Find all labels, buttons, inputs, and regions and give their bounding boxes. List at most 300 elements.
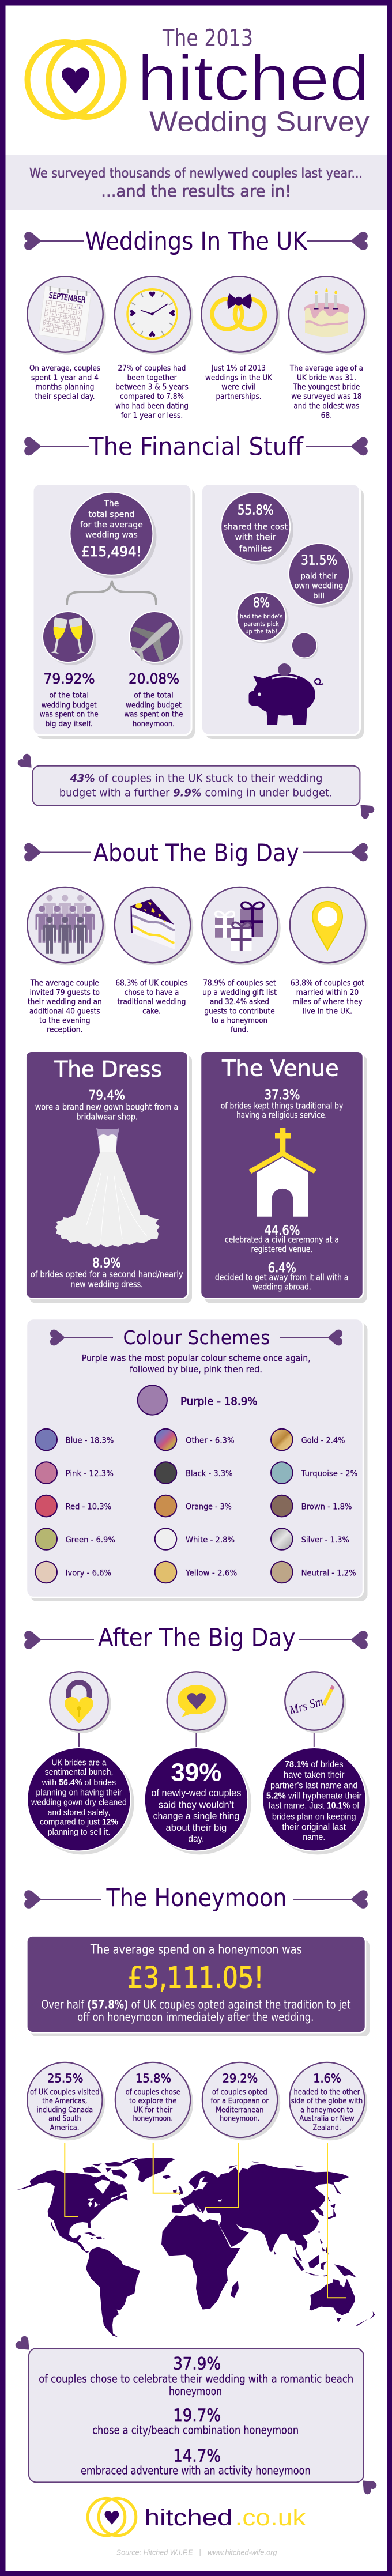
text: wedding facts: between 3 & 5 years [115,383,189,392]
text: wedding facts: we surveyed was 18 [291,392,361,401]
colour swatch labels: Red - 10.3% [66,1502,111,1511]
icon: calendar: 10 [55,314,60,318]
callout: honeymoon types [14,2334,378,2496]
column: no regrets [145,1672,251,1854]
bubble: 39%: 39% [171,1758,221,1786]
colour swatch labels: Turquoise - 2% [301,1469,357,1479]
text: big day facts: and 32.4% asked [210,997,269,1006]
connector lines: bubbles to map [65,2143,346,2298]
stat: big day share: wedding budget [42,700,97,710]
icon: calendar: 25 [59,325,64,329]
text: colour intro [82,1352,311,1375]
text: big day facts: up a wedding gift list [202,988,277,997]
title: The 2013 hitched Wedding Survey: Wedding Survey [149,107,370,138]
bubble: UK: to explore the [129,2096,176,2106]
text: big day facts: cake. [142,1006,161,1016]
bubble: Australia and NZ [289,2062,367,2140]
icon: church [249,1128,316,1217]
map: British Isles [173,2186,183,2195]
stat: big day share: was spent on the [40,710,99,719]
bubble: paid their own [289,544,353,608]
panel: honeymoon spend: Over half (57.8%) of UK couples opted against the tradition to jet [42,1998,351,2012]
panel: calendar circle [27,276,106,355]
bubble: gown text: with 56.4% of brides [42,1778,116,1787]
colour swatch labels: Neutral - 1.2% [301,1569,356,1578]
text: wedding facts: The youngest bride [293,383,360,392]
panel: The Venue: having a religious service. [236,1110,327,1121]
panel: The Dress: wore a brand new gown bought from a [35,1102,178,1112]
bubble: shared the cost: with their [235,533,276,542]
bubble: Australia and NZ: headed to the other [294,2087,360,2096]
map: Eurasia [172,2164,350,2252]
colour swatch grid [35,1429,293,1583]
icon: heart padlock [50,1672,111,1733]
icon: rings and bow tie [212,293,265,329]
heading: Colour Schemes [50,1326,342,1349]
brace [67,581,156,605]
colour swatch labels: Silver - 1.3% [301,1536,349,1545]
bubble: 39% [145,1748,251,1854]
heart: top left [14,2334,35,2355]
colour swatch labels: Brown - 1.8% [301,1502,352,1511]
bubble: 39%: day. [188,1833,204,1845]
map: New Zealand [356,2311,375,2326]
heading: About The Big Day [24,839,368,867]
bubble: 39%: of newly-wed couples [151,1787,241,1798]
stat: honeymoon share: of the total [134,691,174,700]
icon: calendar: 19 [65,320,70,325]
callout: honeymoon types: 14.7% [173,2446,221,2466]
map: Australia [310,2279,355,2322]
icon: calendar: 3 [57,308,60,312]
heart: top left [16,752,37,773]
chart: world map [17,2158,375,2337]
icon: calendar: S [78,307,81,310]
icon: guests [36,895,95,954]
source line [116,2548,277,2557]
icon: calendar: 20 [70,321,75,325]
panel: The Venue: 6.4% [268,1261,296,1276]
icon: calendar: 31 [53,329,58,333]
text: wedding facts: were civil [221,383,256,392]
icon: champagne glasses [43,612,96,665]
map: South America [86,2247,140,2337]
callout: honeymoon types: honeymoon [169,2385,222,2398]
icon: calendar: 7 [78,311,80,315]
heading: The Honeymoon [24,1884,368,1913]
text: colour intro: followed by blue, pink then red. [130,1364,262,1375]
colour swatch labels [66,1436,357,1578]
bubble: Americas: America. [50,2123,79,2132]
panel: The Venue [201,1051,367,1303]
icon: calendar: 4 [62,310,65,313]
callout: honeymoon types: 37.9% [173,2354,221,2374]
text: wedding facts: spent 1 year and 4 [31,373,99,382]
bubble: Americas: the Americas, [42,2096,87,2106]
icon: calendar: T [52,303,55,307]
panel: honeymoon spend: £3,111.05! [127,1961,264,1996]
stat: big day share: 79.92% [44,670,95,687]
heading: The Financial Stuff: The Financial Stuff [89,433,304,462]
bubble: paid their own: bill [313,591,325,601]
bubble: 39%: said they wouldn’t [159,1799,234,1810]
text: big day facts: their wedding and an [28,997,102,1006]
bubble: UK: 15.8% [135,2071,171,2085]
panel: honeymoon spend [27,1936,370,2036]
bubble: bride's parents: parents pick [244,620,279,628]
heart: bottom right [355,799,376,820]
icon: cake slice [130,899,175,949]
icon: speech bubble heart [167,1672,228,1733]
panel: The Dress: 79.4% [89,1088,125,1103]
colour swatch labels: Yellow - 2.6% [185,1569,237,1578]
text: wedding facts: 68. [321,411,332,420]
bubble: last names text: have taken their [284,1770,344,1780]
bubble: 39%: about their big [166,1822,227,1833]
text: big day facts: miles of where they [292,997,363,1006]
map: Africa [161,2214,240,2310]
colour swatch labels: Ivory - 6.6% [66,1569,111,1578]
bubble: gown text: and stored safely, [48,1808,110,1817]
bubble: Americas: and South [48,2114,81,2124]
panel: birthday cake circle [289,276,367,355]
bubble: Europe: of couples opted [212,2087,267,2096]
bubble: paid their own: own wedding [295,582,343,591]
bubble: last names text: 5.2% will hyphenate their [266,1791,362,1801]
source line: | [199,2548,201,2557]
bubble: Australia and NZ: 1.6% [313,2071,341,2085]
icon: Mrs Sm signature with pencil [285,1672,346,1733]
text: wedding facts [29,364,363,420]
icon: calendar: 13 [71,316,76,320]
header: logo and title [28,25,370,138]
text: big day facts [28,979,364,1035]
text: big day facts: reception. [47,1025,83,1035]
text: wedding facts: weddings in the UK [205,373,273,382]
intro band [6,155,387,210]
text: wedding facts: months planning [36,383,95,392]
icon: calendar: 2 [52,308,54,312]
callout: budget: 43% of couples in the UK stuck to their wedding [70,772,322,785]
bubble: last names text: 78.1% of brides [285,1760,344,1770]
text: big day facts: live in the UK. [303,1006,352,1016]
swatch: purple: Purple - 18.9% [180,1396,258,1408]
bubble: UK: of couples chose [126,2087,180,2096]
title: The 2013 hitched Wedding Survey: hitched [137,42,370,114]
text: big day facts: to a honeymoon [212,1016,267,1025]
stat: honeymoon share: was spent on the [125,710,183,719]
text: wedding facts: their special day. [35,392,95,401]
panel: The Dress: 8.9% [92,1257,121,1270]
icon: map pin [312,902,342,950]
bubble: gown text: planning on having their [36,1787,122,1797]
bubble: shared the cost: shared the cost [223,522,288,531]
bubble: Americas: including Canada [37,2105,93,2114]
icon: calendar: 14 [76,316,81,320]
icon: calendar: M [47,302,51,306]
icon: calendar: 18 [60,319,65,323]
stat: honeymoon share [125,670,183,729]
map: Iceland [163,2175,171,2179]
bubble: Australia and NZ: Zealand. [312,2123,341,2132]
text: big day facts: 78.9% of couples set [203,979,276,988]
bubble: paid their own: 31.5% [301,553,337,568]
icon: wedding dress [55,1128,160,1247]
bubble: Europe: honeymoon. [220,2114,259,2124]
bubble: bride's parents: 8% [253,596,270,610]
panel: The Venue: celebrated a civil ceremony at a [225,1235,339,1245]
icon: clock [127,289,177,339]
bubble: Europe: for a European or [211,2096,269,2106]
icon: Mrs Sm signature with pencil: Mrs Sm [287,1694,325,1717]
bubble: last names text: name. [303,1832,325,1842]
colour swatch labels: Other - 6.3% [186,1436,235,1445]
panel: honeymoon spend: off on honeymoon immediately after the wedding. [77,2010,314,2024]
heading: The Honeymoon: The Honeymoon [106,1884,287,1913]
bubble: total spend: £15,494! [81,544,142,560]
panel: The Dress: of brides opted for a second hand/nearly [31,1269,183,1280]
colour swatch labels: White - 2.8% [186,1536,235,1545]
colour swatch labels: Black - 3.3% [186,1469,233,1479]
source line: www.hitched-wife.org [208,2548,277,2557]
heading: About The Big Day: About The Big Day [93,839,299,867]
panel: The Dress [26,1051,192,1303]
icon: calendar: 30 [48,329,53,333]
footer logo [88,2498,306,2536]
stat: honeymoon share: honeymoon. [133,719,175,729]
text: wedding facts: partnerships. [216,392,262,401]
bubble: bride's parents: had the bride’s [240,613,283,620]
text: big day facts: married within 20 [296,988,359,997]
panel: The Venue: 37.3% [265,1088,300,1103]
bubble: total spend: for the average [80,521,143,530]
panel: The Venue: of brides kept things traditional by [221,1100,343,1111]
bubble: UK: UK for their [133,2105,173,2114]
text: wedding facts: been together [127,373,177,382]
icon: calendar: 21 [75,322,80,326]
bubble: gown text: wedding gown dry cleaned [31,1797,127,1807]
stat: honeymoon share: 20.08% [129,670,179,687]
text: big day facts: invited 79 guests to [30,988,100,997]
bubble: last names text: partner’s last name and [270,1781,357,1790]
stat: honeymoon share: wedding budget [126,700,182,710]
panel: The Dress: The Dress [54,1057,162,1082]
icon: calendar: 6 [73,311,76,315]
map: North America [17,2170,128,2253]
bubble: Australia and NZ: Australia or New [299,2114,355,2124]
callout: budget [16,752,376,820]
text: big day facts: The average couple [30,979,99,988]
title: The 2013 hitched Wedding Survey: The 2013 [162,25,253,52]
text: wedding facts: The average age of a [289,364,363,373]
icon: calendar [39,286,91,342]
panel: The Venue: registered venue. [251,1244,312,1254]
icon: calendar: F [68,305,70,308]
text: wedding facts: who had been dating [115,401,189,410]
text: big day facts: chose to have a [125,988,179,997]
icon: calendar: 5 [67,310,70,314]
heading: After The Big Day [24,1624,368,1653]
source line: Source: Hitched W.I.F.E [116,2548,193,2557]
bubble: 39%: change a single thing [153,1811,239,1821]
icon: calendar: 17 [55,319,59,323]
panel: clock circle [115,276,193,355]
icon: calendar: 8 [46,312,49,316]
bubble: Americas: of UK couples visited [30,2087,100,2096]
text: big day facts: fund. [231,1025,248,1035]
bubble: last names text: last name. Just 10.1% of [269,1801,360,1811]
callout: budget: budget with a further 9.9% coming in under budget. [59,786,333,799]
colour swatch labels: Orange - 3% [186,1502,232,1511]
bubble: gown text: planning to sell it. [48,1827,110,1837]
heading: Colour Schemes: Colour Schemes [123,1326,270,1349]
icon: calendar: 27 [69,326,74,330]
icon: calendar: 16 [50,318,54,322]
callout: honeymoon types: chose a city/beach combination honeymoon [92,2423,299,2437]
bubble: total spend: The [103,499,119,508]
icon: calendar: 9 [51,313,54,317]
text: wedding facts: Just 1% of 2013 [211,364,266,373]
bubble: paid their own: paid their [301,572,337,581]
text: wedding facts: UK bride was 31. [297,373,356,382]
text: wedding facts: and the oldest was [293,401,359,410]
icon: calendar: SEPTEMBER [48,291,86,305]
map: Greenland [131,2158,175,2183]
text: big day facts: guests to contribute [204,1006,275,1016]
text: wedding facts: for 1 year or less. [121,411,183,420]
text: colour intro: Purple was the most popular colour scheme once again, [82,1352,311,1363]
bubble: shared the cost [221,492,293,565]
text: big day facts: 63.8% of couples got [291,979,364,988]
panel: cake slice circle [115,887,193,965]
heading: After The Big Day: After The Big Day [98,1624,296,1653]
bubble: shared the cost: families [239,545,272,554]
icon: gifts [215,902,263,951]
map: New Guinea [334,2264,356,2278]
text: wedding facts: On average, couples [29,364,100,373]
bubble: total spend: total spend [88,510,134,519]
column: last names [262,1672,370,1854]
bubble: total spend: wedding was [85,531,138,540]
stat: big day share [40,670,99,729]
text: wedding facts: 27% of couples had [118,364,186,373]
panel: The Dress: bridalwear shop. [76,1111,138,1122]
intro band: ...and the results are in! [101,182,291,201]
colour swatch labels: Gold - 2.4% [301,1436,345,1445]
column: wedding gown [27,1672,134,1854]
icon: calendar: 1 [47,307,50,311]
footer logo: hitched [145,2505,232,2530]
map: Baja California [51,2220,56,2232]
text: big day facts: 68.3% of UK couples [115,979,188,988]
icon: calendar: 22 [44,322,48,326]
icon: calendar: 15 [44,318,49,322]
icon: calendar: 12 [66,315,70,319]
bubble: bride's parents: up the tab! [245,628,277,635]
panel: total spend [33,484,195,739]
colour swatch labels: Green - 6.9% [66,1536,115,1545]
swatch: purple [138,1385,258,1415]
title: The 2013 hitched Wedding Survey [137,25,370,138]
map: Caribbean islands [84,2232,105,2239]
panel: The Venue: 44.6% [264,1224,300,1238]
icon: calendar: 29 [43,327,48,331]
icon: calendar: T [62,304,66,308]
icon: calendar: 26 [64,325,69,329]
bubble: gown text [27,1748,134,1854]
panel: The Venue: decided to get away from it all with a [215,1272,348,1283]
panel: gifts circle [202,887,281,965]
bubble: Europe: 29.2% [223,2071,258,2085]
panel: The Dress: new wedding dress. [70,1279,143,1289]
icon: calendar: S [73,306,76,310]
heading: Weddings In The UK: Weddings In The UK [85,227,308,256]
heading: The Financial Stuff [24,433,368,462]
panel: honeymoon spend: The average spend on a honeymoon was [90,1943,302,1958]
bubble: UK: honeymoon. [133,2114,173,2124]
icon: aeroplane [122,607,186,670]
panel: The Venue: The Venue [221,1056,339,1081]
text: big day facts: additional 40 guests [29,1006,100,1016]
bubble: gown text: sentimental bunch, [45,1767,113,1777]
bubble: shared the cost: 55.8% [238,503,274,518]
panel: map pin circle [290,887,368,965]
icon: calendar: 24 [54,324,59,328]
text: big day facts: to the evening [39,1016,91,1025]
panel: The Venue: wedding abroad. [252,1281,311,1292]
stat: big day share: of the total [49,691,89,700]
icon: cake [304,288,349,337]
icon: calendar: 11 [61,314,65,318]
colour swatch labels: Blue - 18.3% [66,1436,114,1445]
bubble: Australia and NZ: side of the globe with [291,2096,363,2106]
bubble: last names text: their original last [282,1822,346,1832]
panel: who paid [202,484,364,739]
heart: bottom right [357,2475,378,2496]
text: big day facts: traditional wedding [118,997,186,1006]
bubble: last names text: brides plan on keeping [272,1812,356,1821]
bubble: total spend [70,492,157,579]
bubble: bride's parents [237,592,288,643]
map: Arctic islands [82,2158,140,2179]
footer logo: .co.uk [235,2505,306,2530]
bubble: Australia and NZ: a honeymoon to [300,2105,353,2114]
bubble: Europe: Mediterranean [216,2105,263,2114]
bubble: Europe [202,2062,280,2140]
text: wedding facts: compared to 7.8% [120,392,184,401]
bubble: Americas: 25.5% [47,2071,83,2085]
bubble: small empty [292,633,318,659]
icon: calendar: 28 [74,327,79,331]
panel: rings circle [201,276,280,355]
map: Asian and Pacific islands [229,2161,336,2298]
bubble: UK [115,2062,193,2140]
callout: honeymoon types: 19.7% [173,2405,221,2425]
colour swatch labels: Pink - 12.3% [66,1469,114,1479]
bubble: last names text [262,1748,370,1854]
bubble: Americas [27,2062,105,2140]
icon: piggy bank [249,663,323,725]
icon: calendar: W [57,303,61,307]
panel: guests circle [27,887,106,965]
stat: big day share: big day itself. [45,719,93,729]
callout: honeymoon types: embraced adventure with an activity honeymoon [81,2464,311,2477]
bubble: gown text: compared to just 12% [40,1817,118,1827]
icon: calendar: 23 [49,323,54,327]
panel: Colour Schemes [27,1319,368,1601]
logo: gold rings with heart [28,42,123,117]
bubble: gown text: UK brides are a [52,1758,107,1767]
